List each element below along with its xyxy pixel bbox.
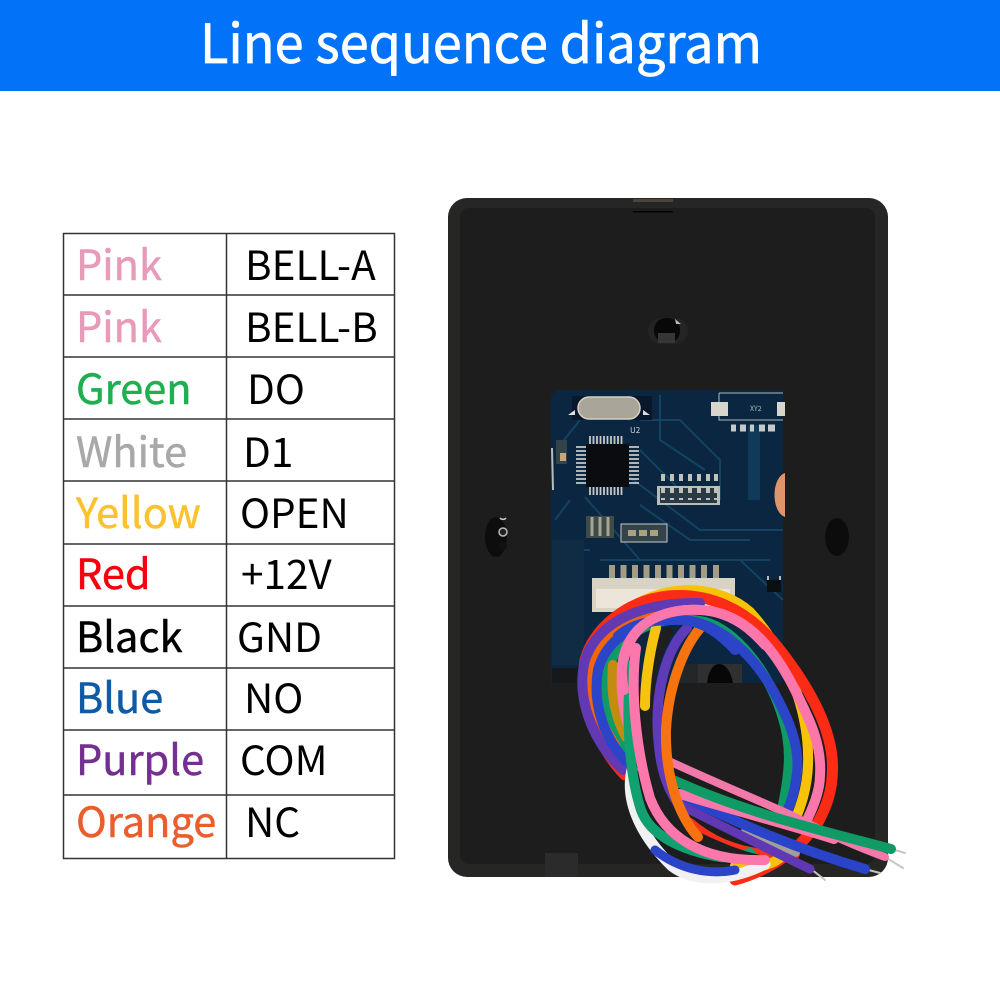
row: orange nc: Orange [76, 789, 216, 849]
microcontroller chip [576, 436, 639, 495]
wire: purple front [657, 628, 687, 812]
row: pink bell-b: BELL-B [245, 295, 378, 354]
wire: pink thick tail [680, 794, 834, 839]
row: pink bell-a: Pink [76, 232, 162, 292]
title: Line sequence diagram [200, 0, 762, 79]
row: black gnd: Black [76, 604, 183, 664]
wire: green loop [605, 619, 789, 805]
wire: purple loop [582, 603, 700, 770]
wire: black [648, 632, 760, 860]
wire: white [630, 770, 765, 878]
row: white d1: White [76, 419, 187, 479]
row: pink bell-b: Pink [76, 294, 162, 354]
row: white d1: D1 [243, 420, 293, 479]
wire tips [811, 839, 905, 880]
mounting hole: top [648, 318, 688, 344]
wire: grey white tail [745, 833, 795, 852]
wire: yellow under tail [735, 858, 780, 868]
wire: yellow loop [640, 590, 808, 820]
wire: blue loop [597, 620, 798, 812]
row: purple com [76, 727, 327, 787]
row: purple com: COM [240, 728, 327, 787]
wire: pink arc over bundle [622, 610, 765, 690]
device back [448, 198, 888, 877]
row: purple com: Purple [76, 727, 204, 787]
row: orange nc: NC [245, 790, 300, 849]
crystal [568, 396, 652, 420]
mounting hole: right [825, 518, 849, 556]
bundle of coloured wires [582, 590, 905, 880]
row: green do: Green [76, 356, 192, 416]
row: orange nc [76, 789, 300, 849]
wire: pink front [634, 648, 765, 860]
wire: yellow dark left [612, 665, 626, 737]
title banner [0, 0, 1000, 91]
terminal connector [592, 565, 735, 612]
wire: green front [628, 665, 750, 857]
wire: blue tail [662, 786, 865, 869]
row: blue no [76, 665, 303, 725]
row: pink bell-a: BELL-A [245, 233, 376, 292]
wire: blue lower [655, 850, 735, 872]
row: red +12v: +12V [241, 542, 332, 601]
wire: green tail [660, 774, 891, 849]
row: green do: DO [247, 357, 305, 416]
speaker edge [774, 473, 785, 517]
wire: blue arc over bundle [618, 620, 735, 650]
xy2 component: XY2 [750, 404, 762, 414]
transistor q2 [767, 576, 781, 592]
row: blue no: NO [244, 666, 303, 725]
row: yellow open: Yellow [75, 480, 201, 540]
pads and resistors [552, 440, 720, 542]
row: pink bell-a [76, 232, 376, 292]
row: red +12v: Red [76, 541, 151, 601]
mounting hole: left [485, 517, 507, 557]
wire: red tail lower [690, 823, 795, 855]
wire: red loop [584, 595, 833, 828]
wire: yellow front [645, 628, 656, 706]
row: yellow open: OPEN [240, 481, 349, 540]
wire: orange top loop [591, 603, 700, 745]
board label: U2: U2 [630, 425, 641, 436]
wire: purple tail [668, 799, 810, 869]
xy2 component [711, 393, 785, 428]
row: red +12v [76, 541, 332, 601]
row: blue no: Blue [76, 665, 163, 725]
wire: pink loop top [622, 610, 820, 824]
row: pink bell-b [76, 294, 378, 354]
wire: red bottom sweep [735, 825, 815, 880]
row: black gnd: GND [237, 605, 322, 664]
component strip at board bottom [552, 664, 742, 683]
row: black gnd [76, 604, 322, 664]
row: yellow open [75, 480, 349, 540]
wire colour table [63, 232, 394, 858]
wire: thin pink tail [658, 756, 885, 857]
row: white d1 [76, 419, 293, 479]
row: green do [76, 356, 305, 416]
wire: orange front [666, 626, 702, 837]
circuit board [551, 390, 785, 683]
